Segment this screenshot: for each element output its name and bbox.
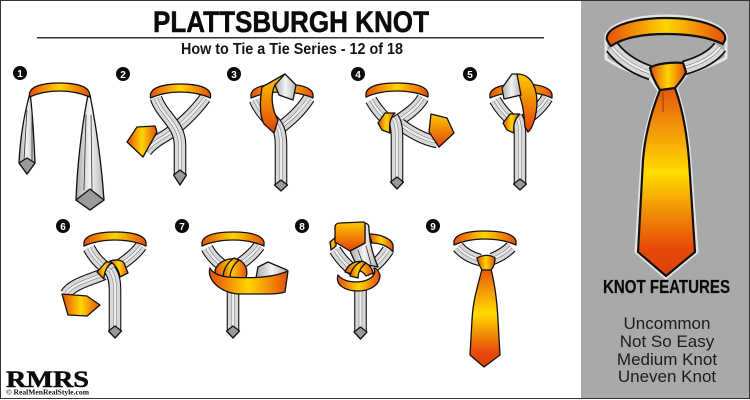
large tie halo [606,16,726,278]
step 4 tail [390,118,404,189]
step 4 [351,67,454,189]
step 1 collar [30,83,90,97]
large tie crease [662,92,664,112]
step 2 crossing band [146,98,205,151]
step 2 badge: 2 [120,70,126,81]
step 9 badge [426,219,440,233]
step 7 gray tip [256,262,287,278]
step 6 knot [97,260,128,279]
step 9 tie blade [470,269,500,367]
step 3 tail [270,118,288,191]
step 7 tail [226,288,240,338]
logo: © RealMenRealStyle.com [6,388,89,396]
step 8 folded band [350,223,378,267]
step 5 [463,67,552,190]
step 5 collar [490,84,552,98]
step 4 orange blade [429,114,454,147]
step 6 tail [108,270,122,338]
features list [617,314,717,386]
step 9 knot [477,255,495,270]
step 6 neck bands [89,246,141,272]
step 1 left tail [19,93,35,174]
step 4 right band [400,124,437,142]
step 5 tail [514,118,526,190]
step 1 badge [13,66,27,80]
step 6 [56,219,146,338]
step 3 badge: 3 [231,70,237,81]
step 2 long tail [156,98,186,185]
step 7 wide wrap [209,268,288,294]
step 5 badge: 5 [467,70,473,81]
step 3 orange blade [260,74,285,133]
step 8 tail [354,285,367,339]
step 9 collar [454,231,516,245]
title rule [37,37,544,38]
features list: Uneven Knot [618,367,716,386]
step 4 collar [366,83,428,97]
step 2 collar [150,84,210,98]
features list: Not So Easy [620,332,715,351]
step 1 right tail [76,95,104,210]
step 8 wrap [337,268,380,291]
step 7 badge: 7 [179,222,185,233]
panel: knot features [581,1,749,398]
logo: RMRS [6,367,89,392]
large tie illustration [606,16,726,278]
step 4 knot wrap [378,113,395,133]
step 1 badge: 1 [17,69,23,80]
step 6 collar [84,232,146,246]
step 4 badge: 4 [355,70,361,81]
step 8 neck bands [335,250,388,270]
step 5 neck bands [495,98,547,126]
step 4 neck bands [371,98,423,128]
large tie knot [650,63,686,90]
step 9 neck bands [458,247,511,260]
features list: Medium Knot [617,350,717,369]
features list: Uncommon [624,314,710,333]
step 6 badge: 6 [60,222,66,233]
step 6 orange blade [62,294,100,316]
step 6 left band [66,274,104,294]
step 3 blade tip [275,74,296,100]
subtitle: How to Tie a Tie Series - 12 of 18 [181,41,403,58]
large tie blade [638,88,695,276]
step 8 badge: 8 [299,222,305,233]
step 5 blade tip [502,74,521,99]
step 2 orange blade [127,126,157,157]
step 9 [426,219,516,367]
step 5 knot wrap [503,114,520,133]
step 8 collar [330,234,393,252]
step 9 badge: 9 [430,222,436,233]
step 7 collar [202,232,264,246]
step 2 [116,67,210,185]
step 7 [175,219,288,338]
step 8 knot loops [345,261,373,278]
step 3 back bands [255,98,309,130]
large tie neck bands [612,47,720,73]
step 8 [295,219,393,339]
large tie collar [607,18,725,46]
step 3 collar [251,84,313,98]
step 8 orange blade [335,222,365,251]
logo [6,367,89,396]
step 1 [13,66,104,210]
step 7 knot [215,258,247,278]
title: PLATTSBURGH KNOT [153,6,429,39]
step 3 [227,67,313,191]
panel background [581,1,749,398]
step 7 neck bands [207,246,259,272]
step 5 orange blade [517,74,537,132]
